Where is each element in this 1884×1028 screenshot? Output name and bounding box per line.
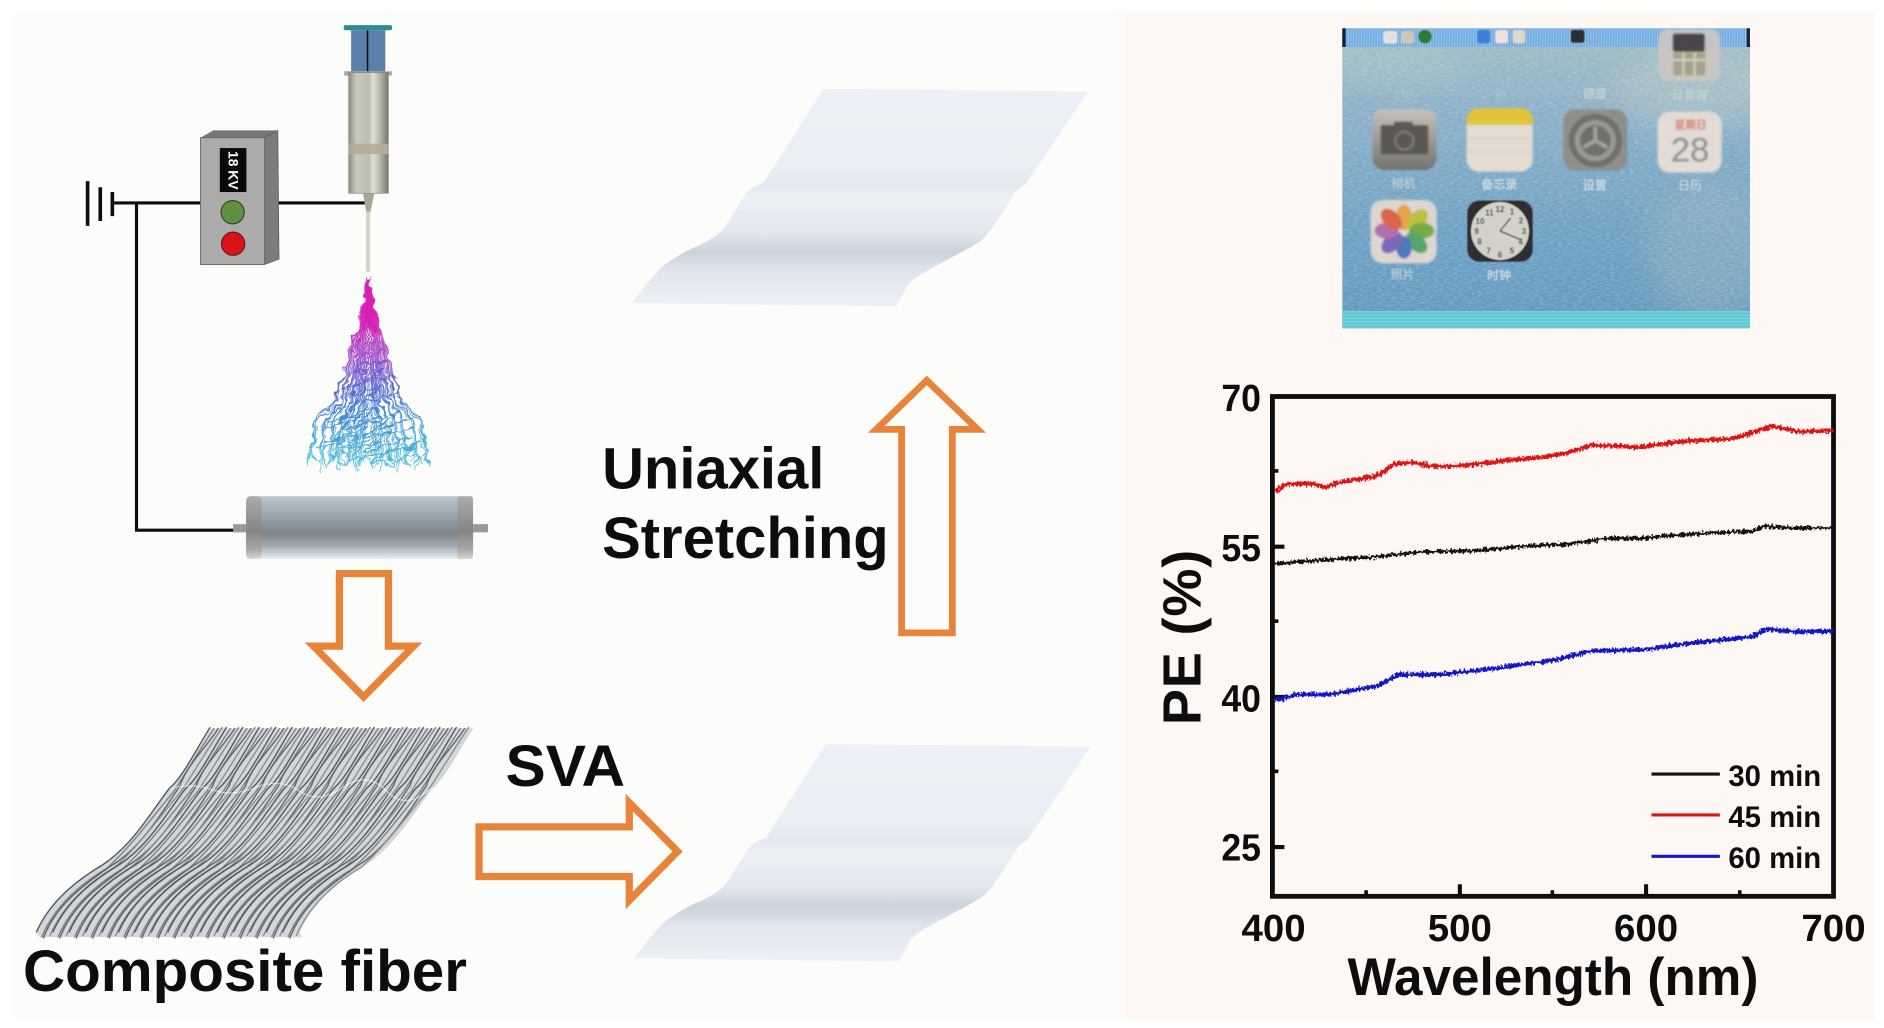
label: SVA: SVA <box>505 735 625 799</box>
film after SVA <box>634 744 1091 961</box>
arrow: roller to fiber <box>313 574 414 697</box>
clock icon: 8 <box>1477 238 1482 247</box>
legend: 45 min <box>1728 801 1821 834</box>
legend <box>1651 760 1821 875</box>
photos icon <box>1371 200 1437 263</box>
muted patches of the screen <box>1347 52 1750 311</box>
axes frame and ticks <box>1272 396 1834 896</box>
label: Uniaxial Stretching <box>602 438 889 571</box>
app name captions: ln <box>1496 86 1506 100</box>
y tick labels: 55 <box>1221 527 1261 570</box>
clock icon: 12 <box>1496 205 1505 214</box>
voltage supply box <box>201 130 279 264</box>
app name captions: 时钟 <box>1487 267 1511 282</box>
top status strip <box>1342 28 1750 47</box>
x axis title: Wavelength (nm) <box>1348 948 1758 1007</box>
clock icon: 3 <box>1522 227 1527 236</box>
y axis title: PE (%) <box>1152 550 1212 725</box>
series: 45 min <box>1275 426 1833 491</box>
clock icon: 1 <box>1510 208 1515 217</box>
label: Uniaxial Stretching: Uniaxial <box>602 438 824 502</box>
process diagram <box>23 25 1091 1004</box>
x tick labels: 400 <box>1242 907 1306 950</box>
voltage readout: 18 KV <box>225 151 241 190</box>
app name captions: ybk <box>1395 86 1416 100</box>
arrow: SVA <box>479 803 678 900</box>
calendar icon: 28 <box>1671 132 1709 170</box>
panel: optical performance background <box>1125 12 1874 1020</box>
label: Composite fiber: Composite fiber <box>23 939 467 1004</box>
clock icon: 9 <box>1474 227 1479 236</box>
calendar icon: 星期日 <box>1675 119 1707 132</box>
clock icon: 5 <box>1510 246 1515 255</box>
bottom dock strip <box>1342 311 1750 328</box>
legend: 30 min <box>1728 760 1821 793</box>
y tick labels: 70 <box>1221 377 1261 420</box>
clock icon: 6 <box>1498 250 1503 259</box>
clock icon: 10 <box>1476 217 1485 226</box>
app name captions: 设置 <box>1583 178 1607 192</box>
y tick labels: 25 <box>1221 826 1261 869</box>
calendar icon <box>1658 112 1722 173</box>
calculator icon <box>1658 29 1720 81</box>
clock icon <box>1467 201 1533 262</box>
app name captions <box>1391 86 1708 282</box>
clock icon: 7 <box>1486 246 1491 255</box>
legend: 60 min <box>1728 842 1821 875</box>
app name captions: 备忘录 <box>1481 177 1517 192</box>
collector roller <box>233 496 488 559</box>
chart: PE vs wavelength <box>1152 377 1866 1007</box>
composite fiber mat <box>36 727 473 938</box>
electrospinning jet fibers <box>307 277 429 472</box>
stretched film <box>632 89 1088 306</box>
series: 30 min <box>1275 526 1833 564</box>
x tick labels: 600 <box>1614 907 1678 950</box>
blurred app icons <box>1371 29 1722 263</box>
y tick labels <box>1221 377 1261 869</box>
clock icon: 11 <box>1485 208 1494 217</box>
circuit wiring and ground symbol <box>88 181 365 530</box>
arrow: uniaxial stretching <box>876 380 978 633</box>
settings icon <box>1563 109 1627 171</box>
camera icon <box>1373 109 1437 170</box>
x tick labels: 700 <box>1801 907 1866 950</box>
app name captions: 日历 <box>1678 178 1702 192</box>
notes icon <box>1467 108 1533 172</box>
phone screen seen through polarizer <box>1342 28 1750 328</box>
app name captions: 相机 <box>1391 175 1415 190</box>
panel: fabrication process background <box>14 12 1125 1020</box>
x tick labels: 500 <box>1428 907 1492 950</box>
app name captions: 计算器 <box>1672 87 1708 102</box>
syringe and needle <box>344 25 392 272</box>
app name captions: 健康 <box>1583 86 1607 101</box>
app name captions: 照片 <box>1391 267 1415 282</box>
y tick labels: 40 <box>1221 677 1261 720</box>
clock icon: 4 <box>1518 238 1523 247</box>
series: 60 min <box>1275 629 1833 701</box>
label: Uniaxial Stretching: Stretching <box>602 507 889 571</box>
clock icon: 2 <box>1519 216 1524 225</box>
x tick labels <box>1242 907 1866 950</box>
